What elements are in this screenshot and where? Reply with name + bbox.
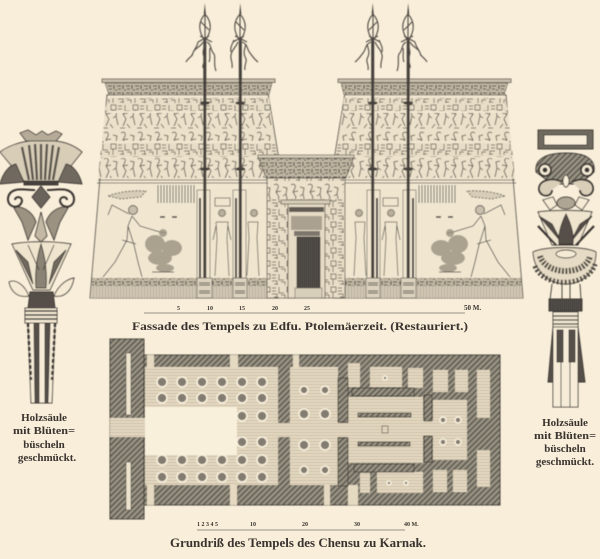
floor areas xyxy=(110,363,490,493)
right column caption: Holzsäule xyxy=(542,417,588,429)
central diamond xyxy=(32,186,50,208)
binding bands xyxy=(553,312,578,327)
floor plan of the temple of Khonsu at Karnak xyxy=(110,339,500,519)
deity relief figures xyxy=(212,188,259,278)
right column: wooden column with flower bunches xyxy=(533,130,596,407)
left column caption: Holzsäule xyxy=(21,412,67,424)
columns of the court xyxy=(157,376,461,485)
doorway gaps xyxy=(147,355,358,505)
facade scale bar: 25 xyxy=(304,306,310,312)
dark band xyxy=(549,299,582,311)
tapering side hatching xyxy=(548,327,553,382)
facade caption: Fassade des Tempels zu Edfu. Ptolemäerzeit. (Restauriert.) xyxy=(132,321,468,333)
lower scrolls xyxy=(539,180,562,196)
plan scale bar: 20 xyxy=(302,522,308,528)
inner walls xyxy=(338,378,432,486)
abacus xyxy=(538,130,593,149)
plan scale bar: 40 M. xyxy=(404,522,419,528)
side flowers xyxy=(0,164,24,184)
side buds xyxy=(9,281,29,296)
central gate xyxy=(258,155,354,298)
semicircular collar xyxy=(533,248,596,284)
wall stub xyxy=(382,426,388,433)
binding bands xyxy=(25,308,57,323)
right column caption: büscheln xyxy=(544,443,586,455)
flag masts xyxy=(200,3,245,278)
flower leaves xyxy=(538,210,592,245)
left pylon xyxy=(90,3,280,298)
pylon inner slots xyxy=(126,353,131,510)
top small flowers xyxy=(20,130,62,141)
mast channels xyxy=(197,190,210,278)
upper volutes xyxy=(539,164,551,176)
facade of the temple at Edfu xyxy=(90,3,523,298)
upper fan xyxy=(536,153,594,184)
facade scale bar: 20 xyxy=(272,306,278,312)
left column: wooden column with flower bunches xyxy=(0,130,82,403)
left column caption: geschmückt. xyxy=(18,452,76,464)
facade scale bar: 15 xyxy=(239,306,245,312)
pylon block xyxy=(110,339,144,519)
plan scale bar: 10 xyxy=(250,522,256,528)
doorway xyxy=(288,200,325,298)
plan scale bar: 30 xyxy=(354,522,360,528)
volutes xyxy=(8,189,74,207)
facade scale bar xyxy=(144,304,481,313)
facade scale bar: 5 xyxy=(177,306,180,312)
right column caption: mit Blüten= xyxy=(534,430,596,442)
shaft xyxy=(28,323,55,403)
open court xyxy=(145,407,237,455)
smiting pharaoh figure xyxy=(103,191,166,277)
main flower fan xyxy=(0,141,82,182)
lotus heads xyxy=(543,197,589,210)
left column caption: mit Blüten= xyxy=(13,425,75,437)
right column caption: geschmückt. xyxy=(536,456,594,468)
left column caption: büscheln xyxy=(23,439,65,451)
neck xyxy=(28,292,55,308)
plan caption: Grundriß des Tempels des Chensu zu Karnak. xyxy=(170,536,426,550)
base frieze and plinth xyxy=(92,278,280,286)
hanging petals xyxy=(14,207,36,240)
facade scale bar: 10 xyxy=(207,306,213,312)
dark door xyxy=(297,237,320,288)
plan scale bar: 1 2 3 4 5 xyxy=(197,522,218,528)
right pylon (mirror of the left) xyxy=(333,3,523,298)
teardrop xyxy=(563,175,569,187)
flags and streamers xyxy=(186,14,258,71)
outer walls xyxy=(144,355,500,505)
left column caption xyxy=(13,412,76,464)
stems xyxy=(550,284,581,300)
lower relief stripes xyxy=(158,185,194,203)
lower flower xyxy=(12,242,71,290)
plan scale bar xyxy=(197,522,419,530)
shaft xyxy=(553,327,578,407)
captives group xyxy=(145,229,182,272)
facade scale bar: 50 M. xyxy=(464,304,481,312)
right column caption xyxy=(534,417,596,468)
